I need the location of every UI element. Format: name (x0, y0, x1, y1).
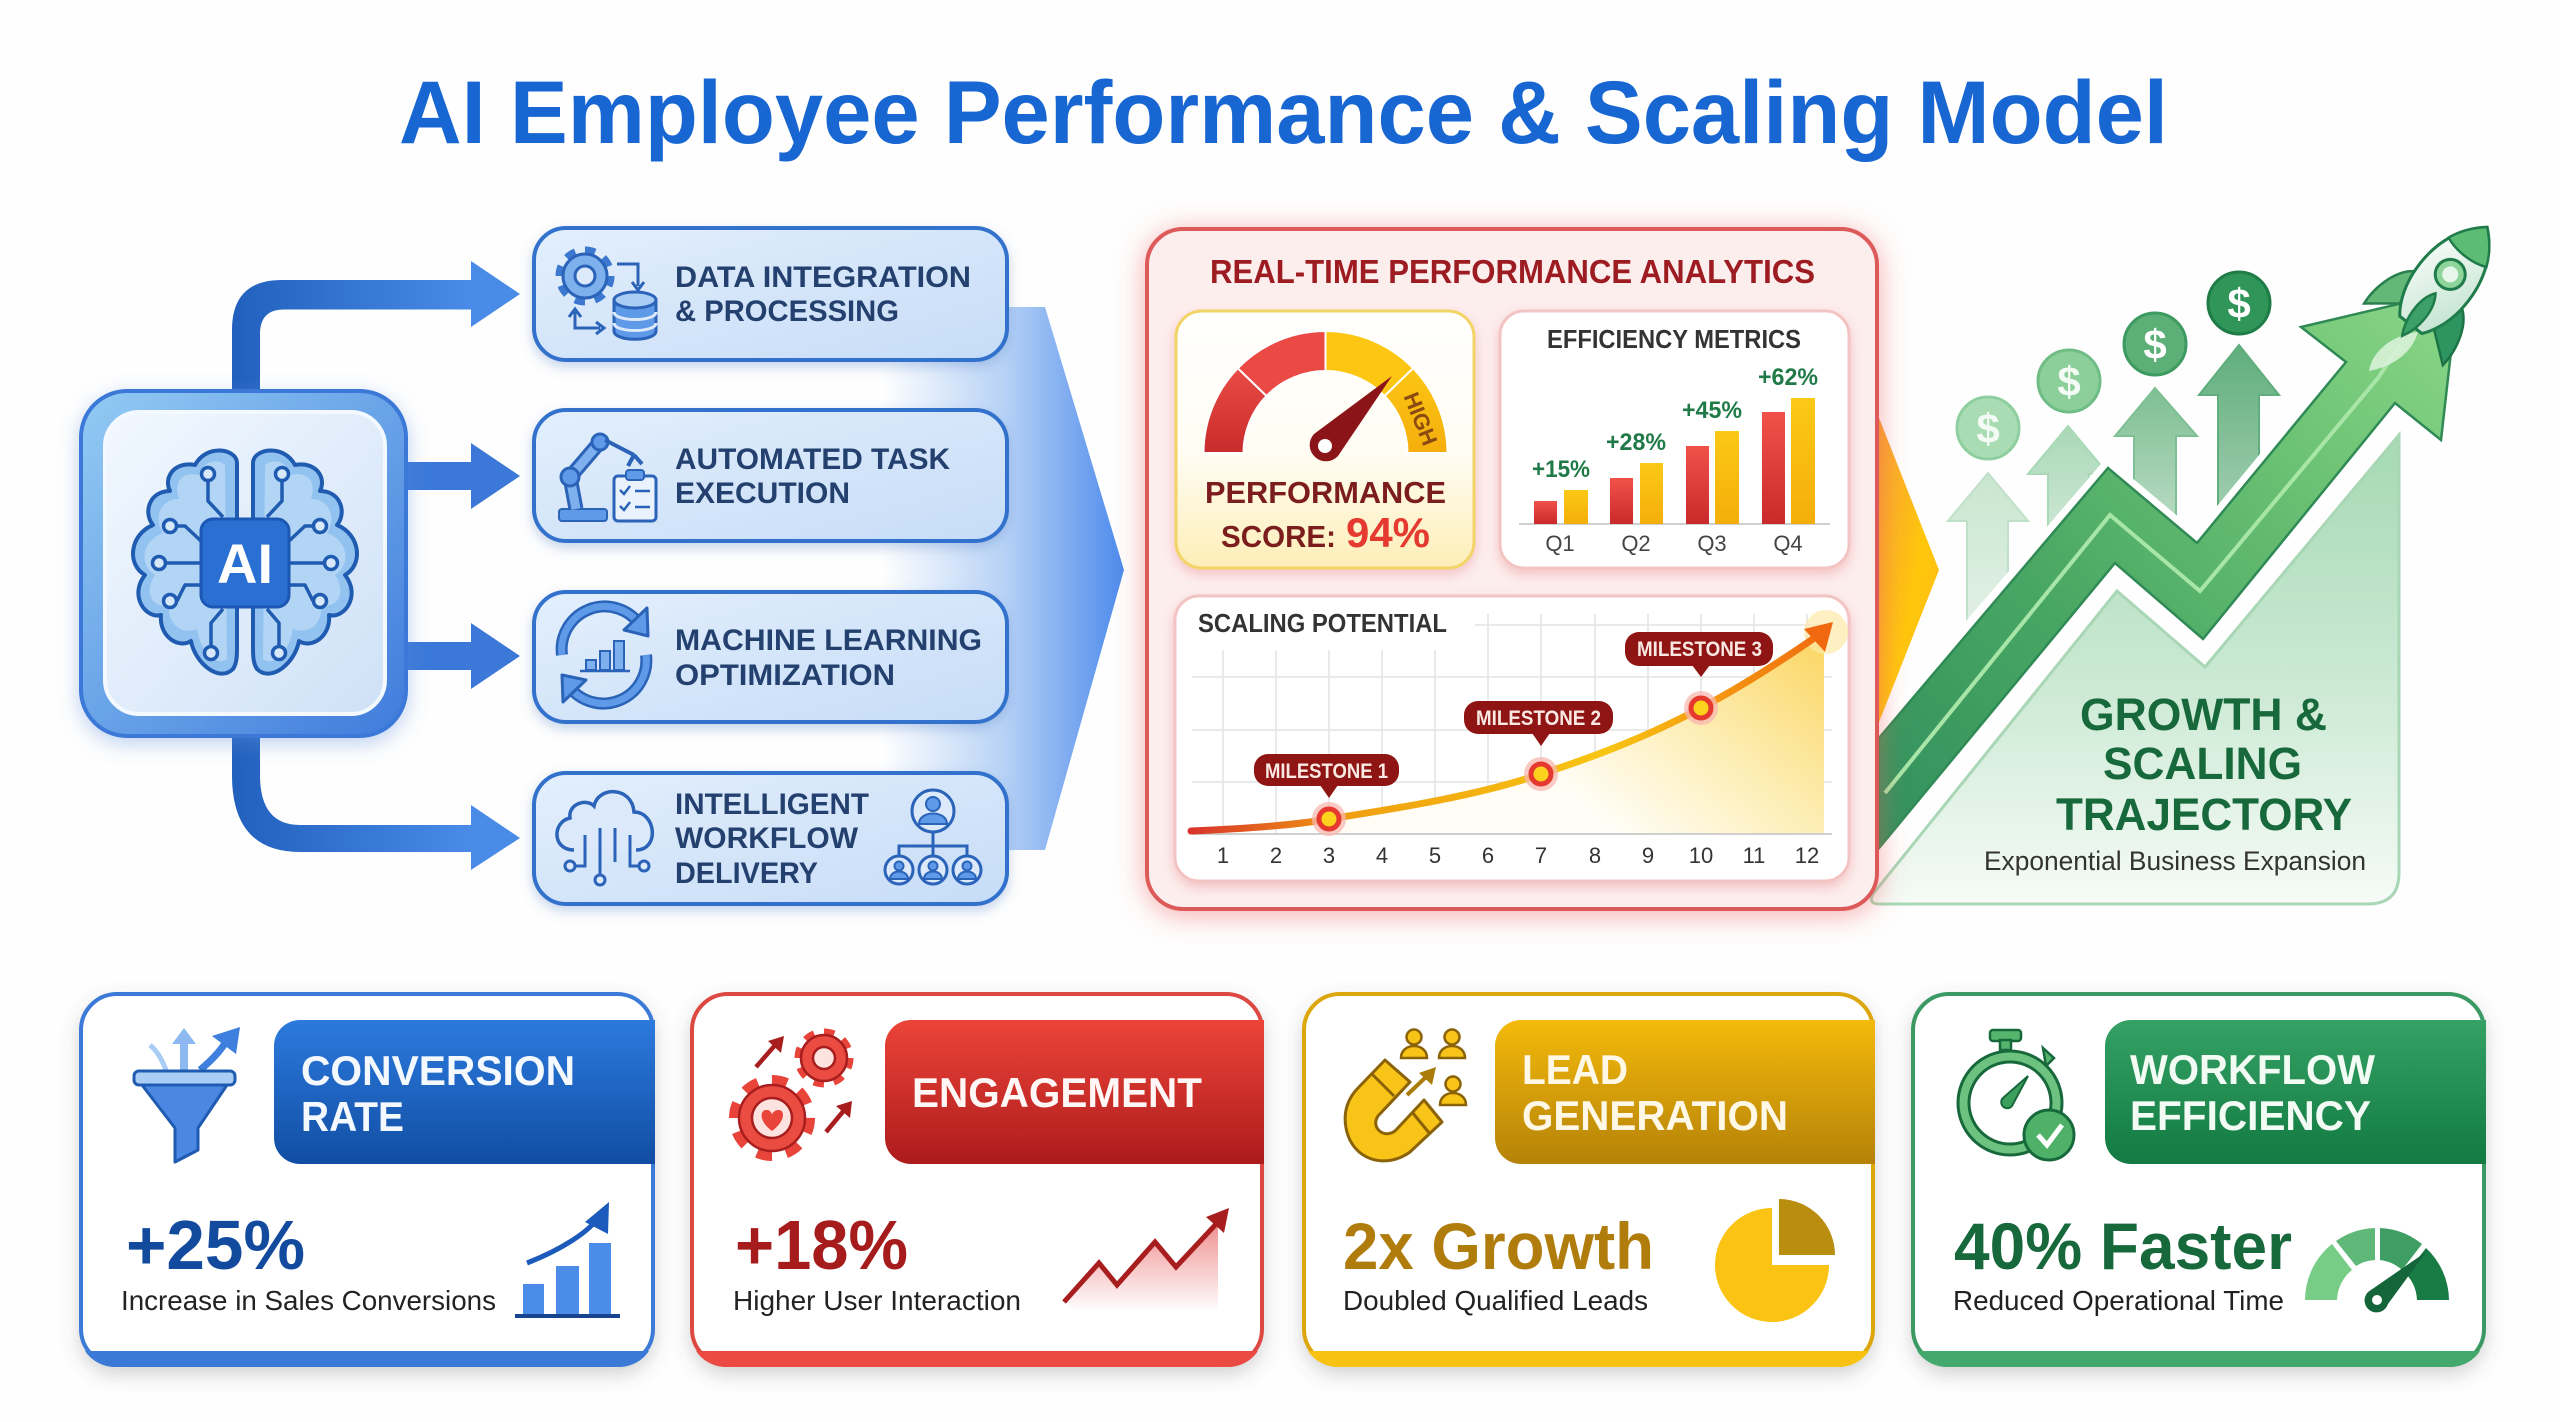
panel: automated task execution (534, 410, 1007, 541)
header tab: engagement: ENGAGEMENT (912, 1069, 1202, 1116)
stat: +25%: +25% (126, 1206, 305, 1284)
axis labels: 7 (1535, 843, 1547, 868)
text: workflow delivery label (675, 788, 869, 890)
panel: green growth area (1871, 435, 2399, 904)
axis labels: 6 (1482, 843, 1494, 868)
panel: performance score (1176, 311, 1474, 568)
header tab: conversion rate (274, 1020, 655, 1164)
icon: cycle with bars (562, 606, 648, 704)
heading: analytics: REAL-TIME PERFORMANCE ANALYTICS (1210, 253, 1815, 290)
bar chart: Q1 (1545, 531, 1575, 556)
header tab: conversion rate: CONVERSION (301, 1047, 575, 1094)
text: automated task label: EXECUTION (675, 477, 850, 510)
axis labels: 4 (1376, 843, 1388, 868)
panel: workflow efficiency (1913, 994, 2486, 1367)
panel: data integration (534, 228, 1007, 360)
icon: dollar coin 1: $ (1976, 405, 2000, 452)
icon: faded up arrow 4 (2199, 345, 2279, 520)
stat: +18%: +18% (735, 1206, 908, 1284)
panel: intelligent workflow delivery (534, 773, 1007, 904)
panel: scaling potential (1175, 596, 1849, 881)
axis labels: 9 (1642, 843, 1654, 868)
icon: gear and database (560, 251, 656, 339)
text: growth heading: SCALING (2103, 738, 2302, 789)
bar chart: +62% (1758, 364, 1818, 391)
icon: faded up arrow 2 (2028, 426, 2108, 540)
callout: milestone 3 (1625, 632, 1773, 677)
text: reduced operational time: Reduced Operational Time (1953, 1285, 2284, 1316)
axis labels: 5 (1429, 843, 1441, 868)
milestone 1 marker (1312, 802, 1346, 836)
axis labels: 1 (1217, 843, 1229, 868)
callout: milestone 3: MILESTONE 3 (1637, 638, 1762, 661)
icon: gears with heart (735, 1033, 852, 1155)
heading: scaling potential: SCALING POTENTIAL (1198, 608, 1447, 638)
bar chart: Q2 (1621, 531, 1651, 556)
text: performance score (1205, 475, 1446, 556)
bar chart (1519, 364, 1830, 556)
axis labels: 3 (1323, 843, 1335, 868)
panel: real-time performance analytics (1147, 229, 1877, 909)
text: performance score: 94% (1346, 509, 1430, 556)
text: machine learning label: MACHINE LEARNING (675, 624, 982, 657)
arrow: large blue chevron behind tasks (880, 307, 1124, 850)
bar chart: Q3 (1697, 531, 1727, 556)
icon: dollar coin 3: $ (2143, 321, 2167, 368)
icon: dollar coin 1 (1957, 397, 2019, 459)
icon: rising bars (515, 1202, 620, 1316)
icon: faded up arrow 3 (2115, 388, 2197, 530)
rocket flame (2369, 332, 2418, 371)
axis labels: 2 (1270, 843, 1282, 868)
text: machine learning label (675, 624, 982, 692)
icon: rocket (2363, 196, 2527, 367)
text: growth heading (2056, 689, 2352, 840)
header tab: lead generation: LEAD (1522, 1046, 1628, 1093)
text: doubled qualified leads: Doubled Qualified Leads (1343, 1285, 1648, 1316)
icon: speed gauge (2305, 1228, 2449, 1312)
icon: dollar coin 3 (2124, 313, 2186, 375)
icon: dollar coin 4: $ (2227, 280, 2251, 327)
icon: cloud circuits (557, 792, 652, 885)
gauge (1204, 331, 1448, 461)
icon: funnel (134, 1027, 240, 1162)
header tab: conversion rate: RATE (301, 1093, 404, 1140)
text: increase in sales conversions: Increase in Sales Conversions (121, 1285, 496, 1316)
icon: magnet attracting people (1345, 1030, 1466, 1161)
arrow: AI to machine learning (408, 623, 520, 689)
callout: milestone 2: MILESTONE 2 (1476, 707, 1601, 730)
panel: engagement (692, 994, 1264, 1367)
text: data integration label (675, 261, 971, 328)
icon: faded up arrow 1 (1948, 473, 2028, 640)
bar chart: +15% (1532, 456, 1590, 483)
header tab: workflow efficiency: EFFICIENCY (2130, 1092, 2371, 1139)
text: machine learning label: OPTIMIZATION (675, 659, 895, 692)
header tab: engagement (885, 1020, 1264, 1164)
icon: robot arm and clipboard (559, 434, 656, 521)
stat: 40% faster: 40% Faster (1954, 1209, 2292, 1283)
text: higher user interaction: Higher User Interaction (733, 1285, 1021, 1316)
text: performance score: SCORE: (1221, 519, 1336, 554)
header tab: workflow efficiency (2105, 1020, 2486, 1164)
bar chart: +28% (1606, 429, 1666, 456)
callout: milestone 2 (1464, 701, 1613, 746)
arrow: orange chevron to growth (1870, 395, 1939, 745)
header tab: workflow efficiency: WORKFLOW (2130, 1046, 2375, 1093)
text: growth heading: TRAJECTORY (2056, 789, 2352, 840)
text: automated task label (675, 443, 950, 510)
text: data integration label: & PROCESSING (675, 295, 899, 328)
text: automated task label: AUTOMATED TASK (675, 443, 950, 476)
text: workflow delivery label: WORKFLOW (675, 822, 859, 855)
arrow: AI to data integration (232, 261, 520, 389)
icon: dollar coin 2: $ (2057, 358, 2081, 405)
title: AI Employee Performance & Scaling Model (399, 62, 2168, 162)
callout: milestone 1 (1254, 754, 1399, 798)
heading: efficiency metrics: EFFICIENCY METRICS (1547, 324, 1801, 354)
icon: brain: AI (217, 532, 273, 595)
icon: dollar coin 2 (2038, 350, 2100, 412)
arrow: green growth trajectory (1870, 290, 2458, 860)
callout: milestone 1: MILESTONE 1 (1265, 760, 1388, 783)
bar chart: Q4 (1773, 531, 1803, 556)
text: data integration label: DATA INTEGRATION (675, 261, 971, 294)
panel: AI brain (81, 391, 406, 736)
text: workflow delivery label: INTELLIGENT (675, 788, 869, 821)
icon: stopwatch with check (1958, 1030, 2074, 1160)
header tab: lead generation: GENERATION (1522, 1092, 1788, 1139)
text: performance score: PERFORMANCE (1205, 475, 1446, 510)
milestone 2 marker (1524, 757, 1558, 791)
axis labels: 10 (1689, 843, 1713, 868)
panel: lead generation (1304, 994, 1875, 1367)
axis labels: 8 (1589, 843, 1601, 868)
icon: rising zigzag (1064, 1208, 1229, 1312)
text: growth heading: GROWTH & (2080, 689, 2327, 740)
bar chart: +45% (1682, 397, 1742, 424)
axis labels: 12 (1795, 843, 1819, 868)
text: workflow delivery label: DELIVERY (675, 857, 818, 890)
header tab: lead generation (1495, 1020, 1875, 1164)
arrow: AI to automated task (408, 443, 520, 509)
line chart (1191, 610, 1848, 868)
icon: org chart people (885, 790, 981, 884)
panel: machine learning optimization (534, 592, 1007, 722)
axis labels (1217, 843, 1819, 868)
milestone 3 marker (1684, 691, 1718, 725)
panel: efficiency metrics (1500, 311, 1849, 568)
text: growth subtitle: Exponential Business Expansion (1984, 846, 2366, 876)
gauge: HIGH (1399, 389, 1442, 449)
icon: brain (133, 450, 357, 674)
axis labels: 11 (1743, 843, 1765, 868)
icon: dollar coin 4 (2208, 272, 2270, 334)
arrow: AI to workflow delivery (232, 738, 520, 870)
panel: conversion rate (81, 994, 655, 1367)
icon: pie chart (1715, 1199, 1835, 1322)
stat: 2x growth: 2x Growth (1343, 1209, 1654, 1283)
